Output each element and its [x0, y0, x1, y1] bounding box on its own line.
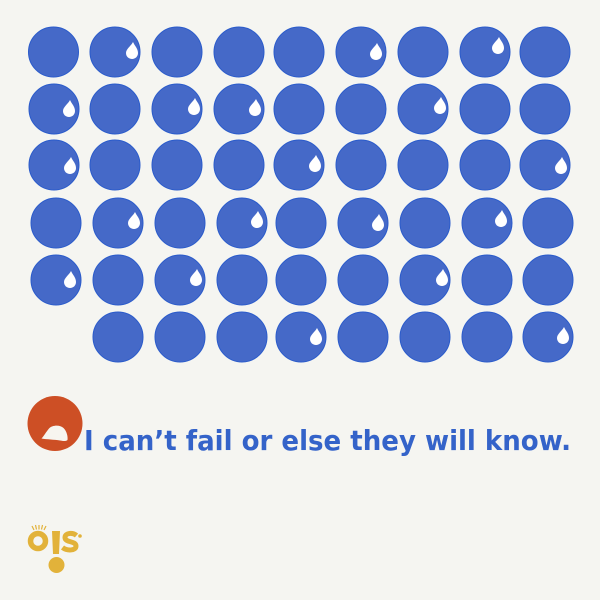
grid of blue circles: [28, 27, 573, 362]
logo letter O: [30, 534, 46, 548]
logo letter S: [62, 533, 76, 550]
logo crown rays: [32, 525, 46, 530]
logo big dot: [48, 557, 64, 573]
white teardrops: [63, 37, 569, 345]
icon: orange sad face circle: [28, 396, 82, 451]
logo letter I: [52, 531, 60, 554]
logo: OIS: [30, 525, 82, 573]
statement text: I can’t fail or else they will know.: [84, 424, 571, 457]
logo registered dot: [78, 534, 82, 538]
